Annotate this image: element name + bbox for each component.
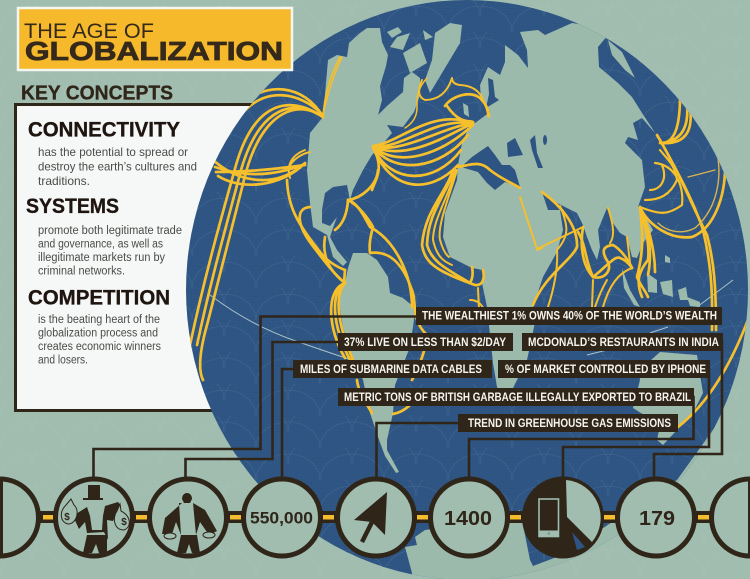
circle: 550,000 miles of cable: 550,000 — [250, 508, 313, 528]
concept: competition: and losers. — [38, 354, 88, 366]
land: kamchatka — [608, 40, 635, 78]
label: mcdonald's — [522, 333, 723, 351]
concept: systems: and governance, as well as — [38, 238, 163, 250]
inland seas — [461, 78, 547, 190]
land: greenland — [425, 23, 462, 93]
concept: connectivity: has the potential to spread or — [38, 145, 188, 159]
label: british garbage — [338, 388, 694, 406]
circle icon: wealthy man with money bags — [56, 479, 132, 556]
concept: connectivity: CONNECTIVITY — [28, 118, 180, 142]
aral sea — [543, 135, 547, 145]
label: submarine cables: MILES OF SUBMARINE DATA CABLES — [300, 364, 482, 376]
thin data lines — [210, 280, 733, 360]
label: british garbage: METRIC TONS OF BRITISH GARBAGE ILLEGALLY EXPORTED TO BRAZIL — [344, 392, 691, 404]
circle icon: wealthy man with money bags: $ — [64, 512, 70, 523]
concept: systems: criminal networks. — [38, 266, 125, 278]
chain links — [0, 511, 750, 523]
land: south america — [338, 253, 415, 473]
land masses — [307, 23, 750, 579]
circle icon: rising trend arrow — [338, 479, 414, 556]
concept: systems: illegitimate markets run by — [38, 252, 165, 264]
label: 37% — [338, 333, 513, 351]
label: greenhouse gas — [458, 414, 678, 432]
label: greenhouse gas: TREND IN GREENHOUSE GAS EMISSIONS — [468, 418, 671, 430]
cables: mediterranean and red sea — [458, 164, 583, 250]
cables: caribbean and south atlantic — [335, 170, 427, 380]
cables: west africa — [422, 170, 484, 310]
land: eurasia and africa — [443, 23, 655, 405]
concept: competition: globalization process and — [38, 328, 158, 340]
label: mcdonald's: MCDONALD’S RESTAURANTS IN INDIA — [528, 337, 719, 349]
panel: key concepts background — [16, 104, 356, 410]
concept: systems — [26, 195, 182, 278]
concept: competition: is the beating heart of the — [38, 314, 160, 326]
cables: east asia — [637, 97, 750, 427]
label: wealthiest — [416, 307, 722, 325]
circle: 179 restaurants: 179 — [639, 507, 675, 530]
label: submarine cables — [293, 360, 492, 378]
concept: competition: COMPETITION — [28, 286, 170, 310]
circle: left partial — [0, 479, 38, 556]
cables — [190, 57, 750, 427]
cables: americas pacific coast — [287, 180, 421, 414]
circle icon: wealthy man with money bags: $ — [121, 517, 127, 528]
concept: competition: creates economic winners — [38, 341, 161, 353]
land: british isles — [463, 103, 469, 117]
land: southeast asian islands — [622, 255, 700, 307]
circle: 179 restaurants — [618, 479, 694, 556]
cables: north pacific — [190, 57, 342, 380]
circle: 1400 metric tons: 1400 — [444, 507, 492, 530]
label: iphone: % OF MARKET CONTROLLED BY IPHONE — [505, 364, 706, 376]
land: antarctica — [405, 430, 713, 579]
title — [18, 8, 292, 70]
circle: 550,000 miles of cable — [244, 479, 320, 556]
baltic sea — [486, 78, 499, 108]
cables: indian ocean — [533, 192, 632, 307]
title: GLOBALIZATION — [25, 38, 283, 66]
concept: competition — [28, 286, 170, 366]
concept: systems: promote both legitimate trade — [38, 225, 182, 237]
caspian sea — [530, 135, 543, 168]
concept: connectivity: destroy the earth’s cultures and — [38, 160, 197, 174]
globe — [186, 0, 750, 579]
circle: right partial — [712, 479, 750, 556]
concept: systems: SYSTEMS — [26, 195, 119, 218]
land: north and central america — [307, 28, 420, 266]
circle: 1400 metric tons — [430, 479, 508, 556]
cables: north atlantic — [372, 78, 489, 190]
connector lines — [94, 316, 722, 478]
heading: key concepts: KEY CONCEPTS — [21, 82, 173, 104]
concept: connectivity — [28, 118, 197, 188]
circle icon: iphone market share pie — [524, 479, 602, 556]
title: THE AGE OF — [24, 20, 154, 43]
concept: connectivity: traditions. — [38, 174, 90, 188]
label: 37%: 37% LIVE ON LESS THAN $2/DAY — [344, 337, 506, 349]
land: australia — [633, 352, 703, 445]
circle icon: man with empty pockets — [150, 479, 226, 556]
black sea — [507, 138, 523, 157]
label: iphone — [498, 360, 710, 378]
mediterranean sea — [461, 146, 520, 190]
land: arctic islands — [387, 27, 433, 73]
